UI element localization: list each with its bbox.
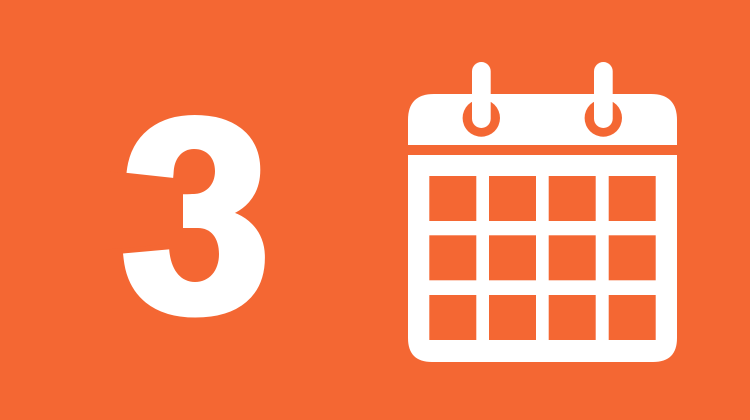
calendar header (408, 94, 677, 145)
icon: calendar (408, 62, 677, 362)
calendar body with date grid (408, 155, 677, 362)
right binding ring (585, 62, 622, 137)
numeral 3: 3 (123, 66, 269, 367)
left binding ring (463, 62, 500, 137)
